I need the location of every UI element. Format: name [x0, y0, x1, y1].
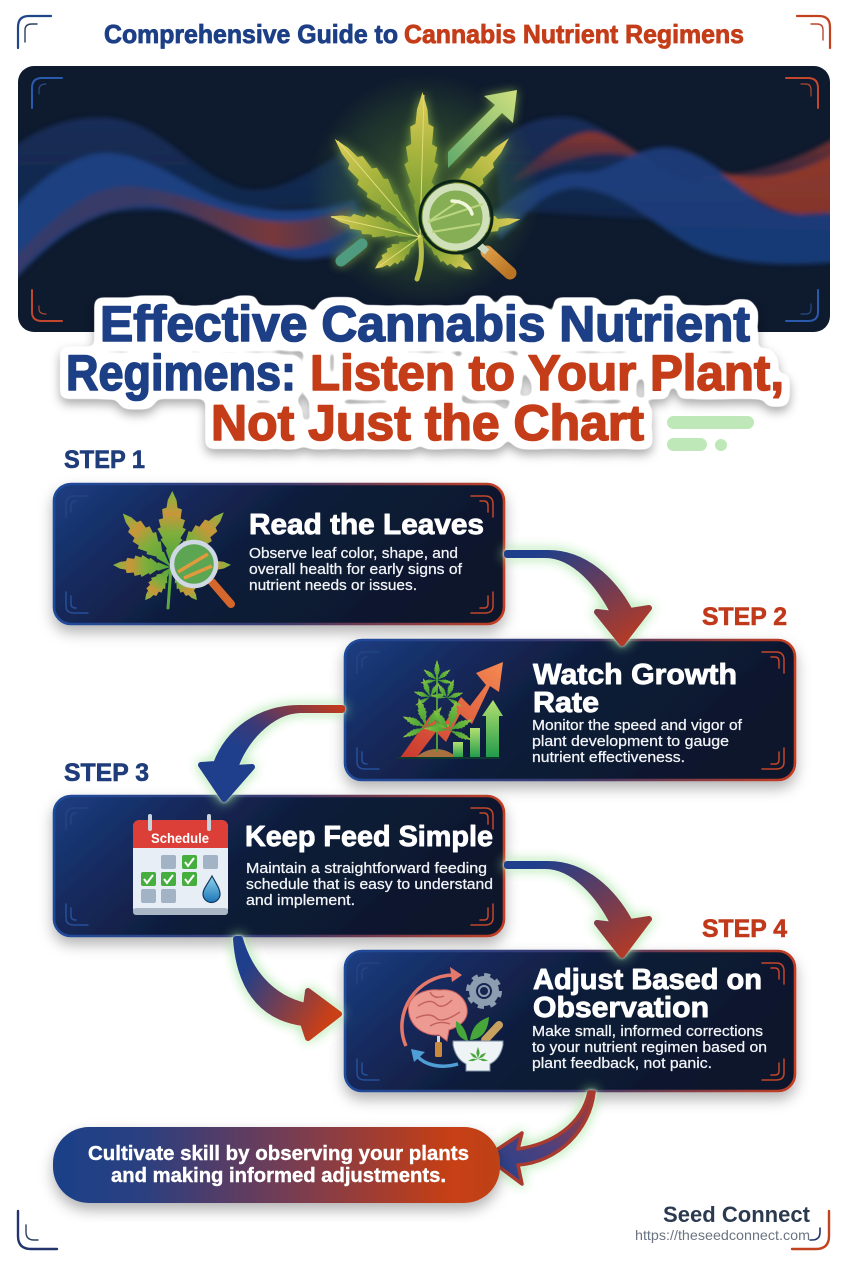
step 3 description: [246, 861, 493, 909]
arrow: step 3 to step 4: [507, 864, 649, 955]
icon: brain, gear and mortar: [402, 967, 503, 1071]
top heading: Comprehensive Guide to: [104, 19, 398, 49]
main title: [66, 296, 784, 451]
step 2 description: Monitor the speed and vigor of: [532, 718, 743, 734]
hero waves: [10, 78, 840, 321]
step 1 description: nutrient needs or issues.: [249, 578, 417, 594]
panel: step 4 adjust based on observation: [345, 951, 795, 1091]
conclusion pill: and making informed adjustments.: [111, 1165, 446, 1187]
step 1 description: [249, 546, 463, 594]
icon: schedule calendar: Schedule: [151, 831, 209, 846]
step 2 label: STEP 2: [702, 603, 787, 631]
step 1 label: STEP 1: [64, 446, 145, 474]
main title: Regimens:: [66, 345, 296, 401]
step 3 description: Maintain a straightforward feeding: [246, 861, 487, 877]
arrow: step 4 to conclusion: [486, 1092, 594, 1184]
step 3 label: STEP 3: [64, 759, 149, 787]
step 4 label: STEP 4: [702, 915, 787, 943]
step 2 description: plant development to gauge: [532, 734, 729, 750]
hero test tube: [341, 244, 362, 261]
step 4 description: to your nutrient regimen based on: [532, 1040, 767, 1056]
hero icon: leaf, growth arrow, magnifier: [307, 72, 543, 308]
hero banner: [10, 66, 840, 332]
decorative title bars: [667, 416, 754, 451]
step 4 heading: [533, 964, 762, 1024]
step 2 heading: Rate: [533, 687, 599, 719]
step 2 description: nutrient effectiveness.: [532, 750, 685, 766]
hero growth arrow: [448, 90, 517, 168]
step 2 heading: [533, 659, 737, 719]
icon: growing plant with chart arrows: [394, 660, 503, 759]
step 2 heading: Watch Growth: [533, 659, 737, 691]
step 1 heading: Read the Leaves: [249, 509, 484, 541]
arrow: step 1 to step 2: [507, 553, 649, 643]
step 1 description: overall health for early signs of: [249, 562, 463, 578]
conclusion pill: [53, 1127, 500, 1203]
top heading: Cannabis Nutrient Regimens: [404, 19, 744, 49]
panel: step 1 read the leaves: [54, 484, 504, 624]
main title: Listen to Your Plant,: [310, 345, 784, 401]
icon: schedule calendar: [133, 814, 228, 915]
arrow: step 2 to step 3: [201, 708, 342, 799]
step 4 heading: Adjust Based on: [533, 964, 762, 996]
step 3 description: schedule that is easy to understand: [246, 877, 493, 893]
step 4 description: [532, 1024, 767, 1072]
brand footer: [635, 1202, 811, 1243]
conclusion pill: Cultivate skill by observing your plants: [88, 1143, 469, 1165]
panel: step 2 watch growth rate: [345, 640, 795, 780]
hero magnifier: [420, 181, 510, 273]
step 4 description: Make small, informed corrections: [532, 1024, 763, 1040]
step 3 description: and implement.: [246, 893, 355, 909]
step 3 heading: Keep Feed Simple: [245, 821, 493, 853]
step 4 heading: Observation: [533, 992, 709, 1024]
step 2 description: [532, 718, 743, 766]
brand footer: https://theseedconnect.com: [635, 1227, 810, 1243]
step 1 description: Observe leaf color, shape, and: [249, 546, 458, 562]
brand footer: Seed Connect: [663, 1202, 811, 1227]
step 4 description: plant feedback, not panic.: [532, 1056, 712, 1072]
top heading: [104, 19, 744, 49]
main title: Effective Cannabis Nutrient: [100, 296, 750, 352]
hero cannabis leaf: [324, 92, 522, 279]
icon: leaf with magnifier: [113, 491, 233, 608]
arrow: step 3 to step 4 lower: [236, 939, 339, 1038]
main title: Not Just the Chart: [211, 395, 644, 451]
panel: step 3 keep feed simple: [54, 796, 504, 936]
